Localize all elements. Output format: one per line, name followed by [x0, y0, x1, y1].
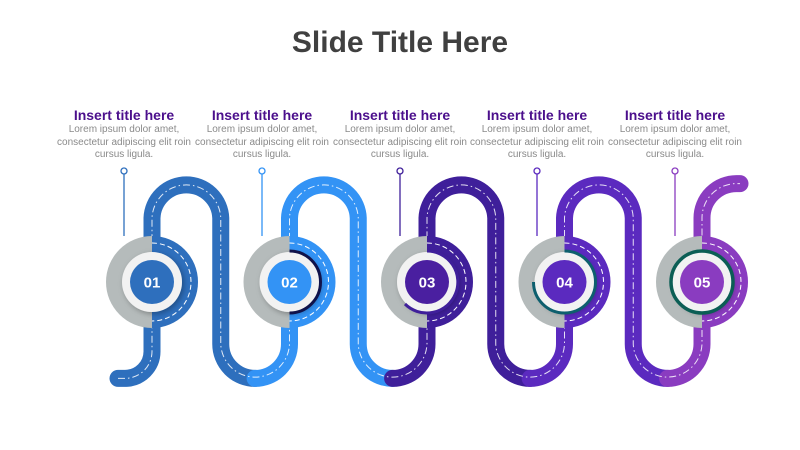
- circle 05: 05: [694, 274, 710, 292]
- text: step 5: consectetur adipiscing elit roin: [608, 136, 742, 148]
- pins: [121, 168, 678, 236]
- text: step 1: consectetur adipiscing elit roin: [57, 136, 191, 148]
- text: step 2: Insert title here: [212, 107, 312, 123]
- text: step 5: [608, 107, 742, 160]
- text: step 3: consectetur adipiscing elit roin: [333, 136, 467, 148]
- circle 02: 02: [281, 274, 298, 292]
- text: step 4: cursus ligula.: [508, 149, 566, 160]
- text: step 2: cursus ligula.: [233, 149, 291, 160]
- circle 04: [518, 236, 610, 328]
- text: step 4: Insert title here: [487, 107, 587, 123]
- text: step 1: Insert title here: [74, 107, 174, 123]
- text: step 5: cursus ligula.: [646, 149, 704, 160]
- text: step 5: Insert title here: [625, 107, 725, 123]
- text: step 1: Lorem ipsum dolor amet,: [69, 124, 179, 135]
- text: step 1: cursus ligula.: [95, 149, 153, 160]
- text: step 2: Lorem ipsum dolor amet,: [207, 124, 317, 135]
- text: step 3: Lorem ipsum dolor amet,: [345, 124, 455, 135]
- circle 04: 04: [556, 274, 573, 292]
- circle 05: [656, 236, 748, 328]
- text: step 4: Lorem ipsum dolor amet,: [482, 124, 592, 135]
- circle 02: [244, 236, 336, 328]
- text: step 2: consectetur adipiscing elit roin: [195, 136, 329, 148]
- text: step 4: [470, 107, 604, 160]
- circle 01: [106, 236, 198, 328]
- text: step 5: Lorem ipsum dolor amet,: [620, 124, 730, 135]
- text: step 3: Insert title here: [350, 107, 450, 123]
- text: step 3: cursus ligula.: [371, 149, 429, 160]
- road segments: [118, 184, 740, 378]
- text: step 3: [333, 107, 467, 160]
- circle 03: 03: [419, 274, 435, 292]
- title: Slide Title Here: [292, 26, 508, 59]
- text: step 2: [195, 107, 329, 160]
- text: step 4: consectetur adipiscing elit roin: [470, 136, 604, 148]
- text: step 1: [57, 107, 191, 160]
- road center dashes: [118, 184, 740, 378]
- circle 01: 01: [144, 274, 160, 292]
- circle 03: [381, 236, 473, 328]
